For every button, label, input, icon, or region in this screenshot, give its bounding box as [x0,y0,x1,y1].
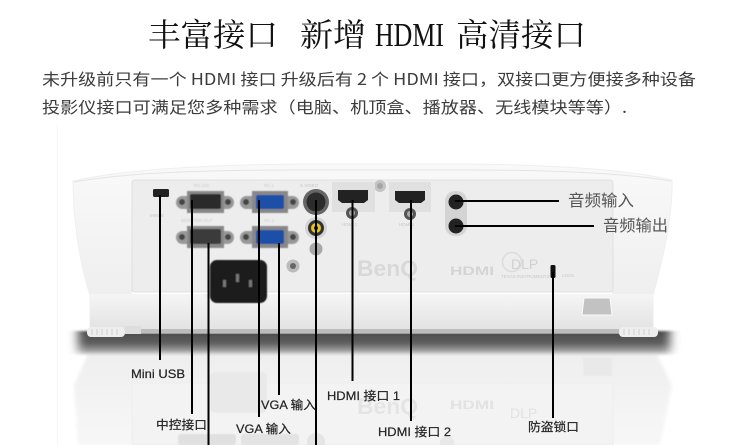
BenQ logo: BenQ [357,256,418,281]
HDMI logo: HDMI [450,264,494,278]
projector reflection: HDMI [450,398,494,412]
icon: mini USB port: MINI B [150,213,164,218]
icon: VGA port 2: PC 2 [264,218,275,223]
icon: security lock slot [550,265,574,278]
label: audio in: 音频输入 [568,187,634,211]
lower housing [90,294,653,331]
icon: mini USB port [150,189,169,218]
icon: S-video port [300,183,329,215]
label: audio out: 音频输出 [603,212,668,236]
adjustable foot left [87,326,141,337]
icon: security lock slot: LOCK [562,273,574,278]
icon: VGA port 1: PC 1 [264,183,275,188]
icon: VGA port 1 [240,183,299,213]
projector body [73,164,672,333]
floor shadow [78,331,670,355]
icon: HDMI port 2: HDMI 2 [399,222,415,227]
icon: S-video port: S VIDEO [300,183,319,188]
vent [582,298,612,315]
title [148,10,586,56]
leader lines [160,195,594,445]
label: control port: 中控接口 [156,417,207,432]
title: 高清接口 [456,10,586,56]
label: HDMI 2: HDMI 接口 2 [378,424,451,439]
projector reflection [57,125,672,445]
DLP logo: TEXAS INSTRUMENTS [501,274,550,279]
adjustable foot right [619,327,658,337]
title: 新增 [300,10,366,56]
label: Mini USB: Mini USB [131,367,185,381]
title: 丰富接口 [148,10,278,56]
icon: audio jacks [445,191,467,236]
title: HDMI [375,17,444,54]
projector reflection: DLP [510,405,537,421]
description text [42,66,696,118]
icon: screws [286,180,386,272]
icon: VGA port 2 [240,218,299,248]
description text: 投影仪接口可满足您多种需求（电脑、机顶盒、播放器、无线模块等等）. [42,94,627,118]
label: HDMI 1: HDMI 接口 1 [327,388,400,403]
icon: video RCA port [305,217,327,239]
label: VGA input 1: VGA 输入 [236,421,291,436]
projector reflection: BenQ [357,394,418,419]
icon: HDMI port 1: HDMI 1 [342,222,358,227]
projector [73,164,672,337]
icon: power socket [210,260,267,303]
connector panel [132,180,613,292]
DLP logo [501,252,550,279]
icon: HDMI port 1 [332,182,375,227]
icon: monitor out port: MONITOR OUT [181,218,213,223]
icon: RS232 port: RS 232 [194,183,210,188]
icon: RS232 port [176,183,234,213]
label: VGA input 2: VGA 输入 [261,397,316,412]
DLP logo: DLP [511,256,538,272]
description text: 未升级前只有一个 HDMI 接口 升级后有 2 个 HDMI 接口，双接口更方便接多种设备 [42,66,696,90]
label: security lock: 防盗锁口 [528,419,579,434]
icon: HDMI port 2 [389,182,431,227]
icon: monitor out port [176,218,234,248]
